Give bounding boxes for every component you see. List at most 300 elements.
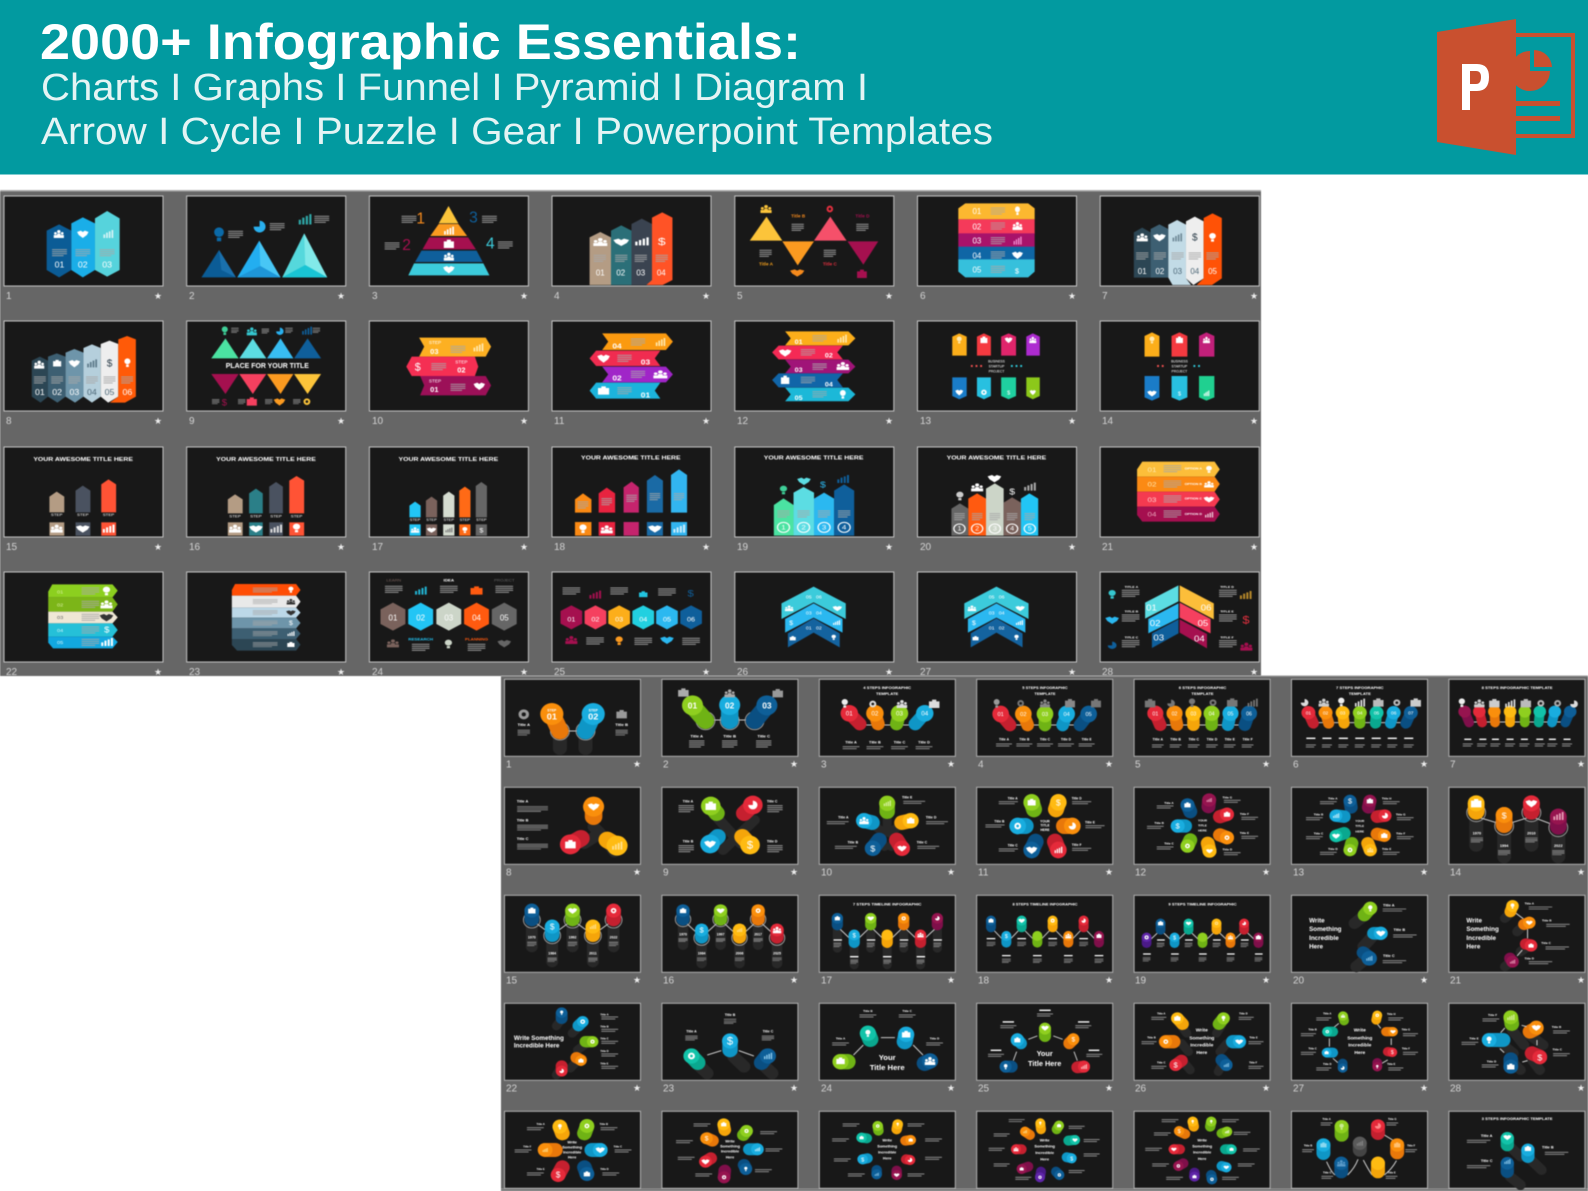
slide 24: your title here, four pills xyxy=(819,1003,955,1094)
slide 21: four option bands: 21 xyxy=(1102,542,1114,553)
slide 10: five petal pills: Title C xyxy=(917,840,928,844)
slide 26: chevron stack: $ xyxy=(789,620,793,627)
slide 5: alternating triangles: 5 xyxy=(737,291,743,302)
slide 34: seven vertical pills: Title C xyxy=(1323,1170,1332,1174)
slide 28: open book 3D chevron: TITLE E xyxy=(1220,610,1235,614)
slide 34: seven vertical pills: Title F xyxy=(1407,1144,1416,1148)
slide 14: six tag shapes: ★ xyxy=(1250,416,1258,426)
slide 25: your title here, five pills: $ xyxy=(1071,1037,1075,1044)
slide 35: three steps infographic template: Title A xyxy=(1481,1134,1493,1138)
slide 12: five ribbon arrows: ★ xyxy=(885,416,893,426)
slide 28: five pill cycle xyxy=(1449,1003,1585,1094)
slide 5: six steps infographic template: 03 xyxy=(1191,711,1196,717)
slide 13: eight petal pills: Title B xyxy=(1314,812,1324,816)
slide 6: stacked five bands: 02 xyxy=(973,223,981,232)
slide 8: three petal pills: ★ xyxy=(633,867,641,877)
slide 25: six coloured hexagons xyxy=(552,572,711,678)
slide 6: seven steps infographic template: 06 xyxy=(1391,710,1397,716)
slide 24: five hexagons: PROJECT xyxy=(494,578,515,583)
slide 6: stacked five bands: 03 xyxy=(973,237,981,246)
slide 12: seven petal pills: 12 xyxy=(1135,868,1147,878)
slide 28: open book 3D chevron: 01 xyxy=(1146,603,1157,612)
slide 20: write something, three pills: Write xyxy=(1309,918,1325,925)
slide 21: four option bands: ★ xyxy=(1250,542,1258,552)
slide 16: six step timeline: 2017 xyxy=(754,933,762,937)
slide 20: write something, three pills: ★ xyxy=(1420,975,1428,985)
slide 1: two step pills: STEP xyxy=(547,708,557,712)
slide 6: stacked five bands: 6 xyxy=(920,291,926,302)
slide 5: six steps infographic template: Title E xyxy=(1225,738,1236,742)
slide 9: four petal pills: 9 xyxy=(663,868,669,878)
slide 26: chevron stack: 01 xyxy=(806,626,812,631)
slide 19: four numbered arrow columns: 3 xyxy=(822,523,826,531)
slide 17: seven step timeline: 17 xyxy=(821,976,833,986)
slide 3: stepped pyramid xyxy=(369,196,528,302)
slide 29: six pill cycle: Title D xyxy=(600,1167,609,1171)
slide 16: six step timeline: 1997 xyxy=(717,933,725,937)
slide 27: write something, eight pills: Title H xyxy=(1387,1012,1396,1016)
slide 35: three steps infographic template: Title C xyxy=(1481,1159,1493,1163)
slide 8: six arrow columns: $ xyxy=(107,359,113,370)
slide 6: seven steps infographic template: 03 xyxy=(1340,710,1346,716)
slide 3: stepped pyramid: 3 xyxy=(469,210,478,227)
slide 16: six step timeline: 1970 xyxy=(679,933,687,937)
slide 27: chevron stack: 01 xyxy=(989,626,995,631)
slide 15: five step timeline: 15 xyxy=(506,976,518,986)
slide 34: seven vertical pills: Title E xyxy=(1387,1170,1396,1174)
slide 8: six arrow columns: 05 xyxy=(105,387,115,397)
slide 7: five arrow columns: 04 xyxy=(1190,267,1200,276)
slide 9: place for your title triangles: $ xyxy=(222,396,228,407)
slide 23: three arc pills xyxy=(662,1003,798,1094)
slide 4: five steps infographic template: 5 STEPS INFOGRAPHIC xyxy=(1022,685,1068,690)
slide 7: five arrow columns: 01 xyxy=(1138,267,1147,276)
slide 30: seven pill cycle: Something xyxy=(720,1145,741,1149)
slide 11: four ribbon arrows: 02 xyxy=(612,374,622,382)
slide 13: eight petal pills: TITLE xyxy=(1355,824,1364,828)
slide 26: chevron stack: 04 xyxy=(816,611,822,616)
slide 29: six pill cycle: Here xyxy=(568,1155,576,1159)
slide 12: five ribbon arrows xyxy=(735,321,894,427)
slide 15: five step timeline: 1970 xyxy=(528,936,536,940)
slide 20: write something, three pills: Incredible xyxy=(1309,935,1339,942)
slide 11: four ribbon arrows: 04 xyxy=(612,342,622,350)
slide 24: five hexagons: LEARN xyxy=(386,578,401,583)
slide 28: five pill cycle: ★ xyxy=(1577,1083,1585,1093)
slide 14: four step timeline: 1994 xyxy=(1500,844,1509,848)
slide 26: write something, six pills: Write xyxy=(1196,1028,1208,1034)
slide 5: alternating triangles: Title D xyxy=(855,214,870,219)
slide 20: write something, three pills: Title A xyxy=(1383,903,1395,907)
slide 22: write something incredible, five pills: ★ xyxy=(633,1083,641,1093)
slide 10: three ribbon arrows: ★ xyxy=(520,416,528,426)
slide 21: write something, four pills: Title C xyxy=(1541,941,1552,945)
slide 4: five steps infographic template xyxy=(977,679,1113,770)
slide 12: seven petal pills: HERE xyxy=(1198,829,1207,833)
slide 21: four option bands: OPTION C xyxy=(1185,497,1203,500)
slide 23: orange and slate stacked arrows: ★ xyxy=(337,667,345,677)
slide 24: your title here, four pills: Title C xyxy=(902,1009,913,1013)
slide 3: four steps infographic template: 01 xyxy=(846,711,853,718)
slide 20: five numbered arrow columns: $ xyxy=(1009,487,1016,497)
slide 17: seven step timeline: ★ xyxy=(947,975,955,985)
slide 26: write something, six pills: Title E xyxy=(1249,1036,1258,1040)
slide 20: write something, three pills: Here xyxy=(1309,943,1324,950)
slide 21: write something, four pills: Something xyxy=(1466,926,1499,933)
slide 30: seven pill cycle xyxy=(662,1111,798,1188)
slide 27: write something, eight pills: 27 xyxy=(1293,1084,1305,1094)
slide 4: five steps infographic template: Title C xyxy=(1040,738,1051,742)
slide 6: seven steps infographic template: 01 xyxy=(1306,710,1311,716)
slide 16: four step columns: STEP xyxy=(250,514,262,519)
slide 12: seven petal pills: YOUR xyxy=(1198,819,1208,823)
slide 6: seven steps infographic template: 6 xyxy=(1293,760,1299,770)
slide 19: four numbered arrow columns: 2 xyxy=(801,523,806,531)
slide 6: stacked five bands: $ xyxy=(1015,267,1019,275)
slide 23: three arc pills: Title A xyxy=(686,1030,697,1034)
slide 29: six pill cycle: Title C xyxy=(614,1144,622,1148)
slide 15: five step timeline: 2011 xyxy=(589,951,597,955)
slide 20: write something, three pills: Something xyxy=(1309,926,1342,933)
slide 16: six step timeline: ★ xyxy=(790,975,798,985)
slide 1: two step pills: 1 xyxy=(506,760,512,770)
slide 9: place for your title triangles: ★ xyxy=(337,416,345,426)
slide 4: five steps infographic template: 4 xyxy=(978,760,984,770)
slide 23: three arc pills: 23 xyxy=(663,1084,675,1094)
slide 15: five step timeline xyxy=(504,895,641,986)
slide 10: five petal pills: $ xyxy=(870,844,875,853)
slide 28: open book 3D chevron: 05 xyxy=(1198,619,1208,628)
slide 1: two step pills: Title A xyxy=(517,722,530,727)
slide 5: six steps infographic template: ★ xyxy=(1262,759,1270,769)
slide 31: eight pill cycle: Write xyxy=(882,1139,892,1143)
slide 24: your title here, four pills: Title A xyxy=(836,1037,846,1041)
slide 19: four numbered arrow columns: 19 xyxy=(737,542,749,553)
slide 3: stepped pyramid: 3 xyxy=(372,291,378,302)
slide 32: nine pill cycle: $ xyxy=(1070,1156,1074,1162)
slide 25: your title here, five pills: Title Here xyxy=(1028,1059,1061,1068)
slide 23: three arc pills: Title C xyxy=(763,1030,774,1034)
slide 19: nine step timeline: 19 xyxy=(1135,976,1147,986)
slide 25: six coloured hexagons: 04 xyxy=(639,615,647,623)
slide 19: four numbered arrow columns: 4 xyxy=(842,523,846,531)
slide 9: four petal pills: Title A xyxy=(683,800,694,804)
slide 15: three step columns xyxy=(4,447,163,553)
slide 19: nine step timeline: ★ xyxy=(1262,975,1270,985)
slide 10: three ribbon arrows: 01 xyxy=(430,385,438,394)
slide 5: six steps infographic template: 04 xyxy=(1209,711,1215,717)
slide 24: five hexagons: 24 xyxy=(372,667,384,678)
slide 1: three arrow columns: 02 xyxy=(78,259,88,269)
slide 18: eight step timeline: 8 STEPS TIMELINE INFOGRAPHIC xyxy=(1012,902,1078,907)
slide 11: six petal pills, your title here xyxy=(977,787,1113,878)
slide 7: five arrow columns: 03 xyxy=(1173,267,1182,276)
slide 4: five steps infographic template: 01 xyxy=(998,712,1004,718)
slide 2: three step pills: Title C xyxy=(757,733,770,738)
slide 21: write something, four pills xyxy=(1449,895,1585,986)
slide 3: four steps infographic template: 4 STEPS INFOGRAPHIC xyxy=(863,685,911,690)
slide 11: six petal pills, your title here: TITLE xyxy=(1040,824,1050,828)
slide 1: two step pills: STEP xyxy=(589,708,599,712)
slide 21: write something, four pills: Incredible xyxy=(1466,935,1497,942)
slide 26: write something, six pills: Title B xyxy=(1147,1036,1156,1040)
slide 11: six petal pills, your title here: Title C xyxy=(1008,844,1018,848)
slide 20: write something, three pills xyxy=(1292,895,1428,986)
slide 11: six petal pills, your title here: Title B xyxy=(994,820,1005,824)
slide 17: five step columns: STEP xyxy=(476,518,487,522)
slide 22: green and cyan stacked arrows: 22 xyxy=(6,667,18,678)
slide 2: three step pills: 02 xyxy=(725,702,735,711)
slide 8: six arrow columns: 04 xyxy=(87,387,97,397)
slide 15: five step timeline: $ xyxy=(550,923,555,932)
slide 16: six step timeline: 1984 xyxy=(698,952,706,956)
slide 12: seven petal pills: $ xyxy=(1176,822,1181,831)
slide 11: six petal pills, your title here: HERE xyxy=(1040,828,1050,832)
slide 28: open book 3D chevron: 02 xyxy=(1150,619,1161,628)
slide 12: seven petal pills: Title F xyxy=(1240,812,1249,816)
slide 21: four option bands: 01 xyxy=(1148,466,1156,474)
slide 21: four option bands: OPTION D xyxy=(1185,512,1203,516)
slide 27: chevron stack: 06 xyxy=(999,595,1005,600)
slide 13: eight petal pills: Title C xyxy=(1314,831,1324,835)
slide 24: five hexagons: 01 xyxy=(389,613,397,622)
slide 17: five step columns xyxy=(369,447,528,553)
slide 32: nine pill cycle: Here xyxy=(1040,1156,1050,1161)
slide 28: open book 3D chevron: 04 xyxy=(1194,634,1205,643)
slide 28: open book 3D chevron: TITLE B xyxy=(1125,610,1139,614)
slide 3: four steps infographic template: Title C xyxy=(894,740,906,744)
slide 27: chevron stack: 27 xyxy=(920,667,932,678)
slide 5: six steps infographic template: 02 xyxy=(1172,711,1178,717)
slide 10: three ribbon arrows: STEP xyxy=(455,359,468,364)
slide 1: two step pills: ★ xyxy=(633,759,641,769)
slide 34: seven vertical pills: Title B xyxy=(1304,1144,1312,1148)
slide 2: three step pills: Title B xyxy=(723,733,736,738)
slide 11: six petal pills, your title here: $ xyxy=(1056,797,1061,807)
slide 8: six arrow columns: 03 xyxy=(69,387,79,397)
slide 2: three step pills: Title A xyxy=(690,733,703,738)
slide 30: seven pill cycle: Here xyxy=(726,1156,734,1160)
slide 4: five steps infographic template: Title D xyxy=(1061,738,1072,742)
slide 19: four numbered arrow columns: ★ xyxy=(885,542,893,552)
slide 13: eight tag shapes: PROJECT xyxy=(989,369,1005,373)
slide 3: stepped pyramid: 4 xyxy=(486,236,495,253)
slide 35: three steps infographic template xyxy=(1449,1111,1585,1188)
slide 33: ten pill cycle xyxy=(1134,1111,1270,1188)
slide 35: three steps infographic template: Title B xyxy=(1542,1146,1554,1150)
slide 4: five steps infographic template: 05 xyxy=(1086,712,1092,718)
slide 27: chevron stack: ★ xyxy=(1068,667,1076,677)
slide 12: five ribbon arrows: 01 xyxy=(795,338,803,346)
slide 28: open book 3D chevron: TITLE F xyxy=(1220,636,1234,639)
slide 16: four step columns: ★ xyxy=(337,542,345,552)
slide 20: write something, three pills: Title C xyxy=(1383,954,1395,958)
slide 2: three step pills xyxy=(662,679,798,770)
slide 27: write something, eight pills: Title B xyxy=(1308,1028,1317,1032)
slide 29: six pill cycle: $ xyxy=(556,1171,561,1180)
slide 27: write something, eight pills: $ xyxy=(1391,1050,1394,1056)
slide 18: five coloured step columns: 18 xyxy=(554,542,566,553)
slide 5: six steps infographic template: Title C xyxy=(1188,738,1200,742)
slide 8: three petal pills: Title B xyxy=(517,819,529,823)
slide 27: chevron stack: 02 xyxy=(999,626,1005,631)
slide 4: five steps infographic template: 03 xyxy=(1042,712,1048,718)
panel: bottom slide sorter, 35 pill diagram slides xyxy=(501,676,1588,1191)
slide 13: eight petal pills: 13 xyxy=(1293,868,1305,878)
slide 12: five ribbon arrows: 02 xyxy=(825,352,833,359)
slide 2: three mountain triangles xyxy=(187,196,346,302)
slide 19: nine step timeline: $ xyxy=(1173,935,1176,941)
slide 13: eight tag shapes: 13 xyxy=(920,416,932,427)
slide 6: seven steps infographic template: 02 xyxy=(1323,710,1329,716)
slide 31: eight pill cycle: Incredible xyxy=(878,1150,896,1154)
slide 23: three arc pills: Title B xyxy=(725,1013,736,1017)
slide 22: write something incredible, five pills: Title B xyxy=(600,1024,609,1028)
slide 28: open book 3D chevron: 06 xyxy=(1201,603,1212,612)
slide 23: three arc pills: ★ xyxy=(790,1083,798,1093)
slide 18: eight step timeline: $ xyxy=(1005,934,1009,940)
slide 13: eight petal pills: Title G xyxy=(1396,812,1406,816)
slide 11: six petal pills, your title here: YOUR xyxy=(1040,820,1050,824)
slide 27: write something, eight pills: ★ xyxy=(1420,1083,1428,1093)
slide 22: green and cyan stacked arrows: 05 xyxy=(57,640,63,646)
slide 9: four petal pills: $ xyxy=(747,840,753,852)
slide 24: five hexagons: IDEA xyxy=(444,578,454,583)
slide 29: six pill cycle: Something xyxy=(562,1145,583,1149)
slide 6: stacked five bands xyxy=(918,196,1076,302)
slide 11: four ribbon arrows: 11 xyxy=(554,416,565,427)
slide 29: six pill cycle: Title A xyxy=(536,1122,545,1126)
slide 27: chevron stack: $ xyxy=(972,620,976,627)
slide 13: eight petal pills: Title H xyxy=(1382,796,1391,800)
slide 21: write something, four pills: Title D xyxy=(1525,956,1535,960)
slide 14: four step timeline: ★ xyxy=(1577,867,1585,877)
slide 27: write something, eight pills: Write xyxy=(1354,1028,1366,1034)
title: 2000+ Infographic Essentials: xyxy=(40,14,801,70)
slide 26: chevron stack: 06 xyxy=(816,595,822,600)
slide 28: five pill cycle: Title C xyxy=(1552,1048,1563,1052)
slide 28: open book 3D chevron: TITLE C xyxy=(1125,636,1139,639)
slide 15: three step columns: STEP xyxy=(103,512,115,517)
slide 3: four steps infographic template: Title A xyxy=(845,740,857,744)
slide 22: write something incredible, five pills: Title D xyxy=(600,1049,609,1053)
slide 29: six pill cycle: Incredible xyxy=(563,1150,581,1154)
slide 26: write something, six pills: Here xyxy=(1196,1050,1208,1056)
slide 17: five step columns: STEP xyxy=(410,518,421,522)
slide 22: green and cyan stacked arrows: $ xyxy=(104,625,110,634)
slide 21: four option bands: 02 xyxy=(1148,480,1156,488)
slide 10: five petal pills: Title E xyxy=(902,796,913,800)
slide 11: six petal pills, your title here: Title D xyxy=(1072,796,1082,800)
slide 11: six petal pills, your title here: Title F xyxy=(1072,843,1082,847)
slide 28: five pill cycle: Title B xyxy=(1552,1025,1562,1029)
slide 6: seven steps infographic template: 07 xyxy=(1408,710,1414,716)
slide 33: ten pill cycle: Write xyxy=(1197,1139,1207,1143)
slide 28: five pill cycle: Title E xyxy=(1469,1036,1479,1040)
slide 29: six pill cycle xyxy=(504,1111,640,1188)
slide 10: three ribbon arrows: 03 xyxy=(430,347,438,356)
slide 14: six tag shapes: STARTUP xyxy=(1172,364,1187,368)
slide 16: four step columns: 16 xyxy=(189,542,201,553)
slide 14: six tag shapes: $ xyxy=(1178,391,1181,397)
slide 31: eight pill cycle: $ xyxy=(861,1157,865,1163)
slide 5: alternating triangles: Title A xyxy=(759,262,773,267)
slide 10: five petal pills: Title A xyxy=(838,816,849,820)
slide 7: eight steps infographic template: 7 xyxy=(1450,760,1456,770)
slide 26: chevron stack xyxy=(735,572,894,678)
slide 8: three petal pills xyxy=(504,787,641,878)
slide 27: write something, eight pills: Title F xyxy=(1402,1046,1410,1050)
slide 32: nine pill cycle: Something xyxy=(1034,1144,1056,1149)
slide 11: six petal pills, your title here: Title A xyxy=(1008,796,1018,800)
slide 18: eight step timeline: 18 xyxy=(978,976,990,986)
slide 4: four arrow columns: 03 xyxy=(636,268,645,278)
slide 7: five arrow columns xyxy=(1100,196,1259,302)
slide 4: four arrow columns: 01 xyxy=(596,268,605,278)
slide 24: five hexagons: RESEARCH xyxy=(408,637,433,642)
slide 24: five hexagons: PLANNING xyxy=(465,637,488,642)
slide 28: open book 3D chevron: 03 xyxy=(1153,633,1164,642)
slide 1: two step pills: Title B xyxy=(615,722,628,727)
slide 3: four steps infographic template: ★ xyxy=(947,759,955,769)
slide 21: write something, four pills: Title A xyxy=(1525,901,1535,905)
slide 27: write something, eight pills: Incredible xyxy=(1348,1043,1372,1049)
slide 4: five steps infographic template: TEMPLATE xyxy=(1034,691,1056,696)
slide 25: your title here, five pills: ★ xyxy=(1105,1083,1113,1093)
slide 4: five steps infographic template: Title E xyxy=(1082,738,1092,742)
slide 14: six tag shapes: BUSINESS xyxy=(1171,359,1188,363)
slide 12: seven petal pills xyxy=(1134,787,1270,878)
slide 11: six petal pills, your title here: 11 xyxy=(978,868,989,878)
slide 17: seven step timeline: $ xyxy=(852,932,857,939)
slide 20: five numbered arrow columns xyxy=(918,447,1076,553)
slide 2: three step pills: ★ xyxy=(790,759,798,769)
slide 1: three arrow columns xyxy=(4,196,163,302)
slide 5: six steps infographic template: Title B xyxy=(1170,738,1181,742)
slide 27: write something, eight pills: Title C xyxy=(1308,1046,1317,1050)
slide 20: five numbered arrow columns: 5 xyxy=(1028,526,1032,532)
slide 19: nine step timeline: 9 STEPS TIMELINE INFOGRAPHIC xyxy=(1168,902,1237,907)
slide 20: five numbered arrow columns: 3 xyxy=(993,526,997,532)
slide 2: three step pills: 01 xyxy=(688,702,698,711)
slide 34: seven vertical pills xyxy=(1292,1111,1428,1188)
slide 5: alternating triangles: Title C xyxy=(823,262,837,267)
slide 6: seven steps infographic template: TEMPLATE xyxy=(1349,691,1371,696)
slide 3: four steps infographic template: Title D xyxy=(918,740,930,744)
slide 6: seven steps infographic template: 04 xyxy=(1357,710,1363,716)
slide 18: five coloured step columns: YOUR AWESOME TITLE HERE xyxy=(581,456,681,461)
slide 24: your title here, four pills: Title Here xyxy=(870,1063,905,1072)
slide 12: seven petal pills: Title D xyxy=(1223,848,1233,852)
slide 21: write something, four pills: 21 xyxy=(1450,976,1462,986)
slide 14: four step timeline: 14 xyxy=(1450,868,1462,878)
slide 5: alternating triangles xyxy=(735,196,894,302)
slide 19: four numbered arrow columns: 1 xyxy=(781,523,786,531)
slide 10: five petal pills: 10 xyxy=(821,868,833,878)
slide 18: five coloured step columns: ★ xyxy=(702,542,710,552)
slide 22: write something incredible, five pills xyxy=(504,1003,641,1094)
slide 12: seven petal pills: TITLE xyxy=(1198,824,1207,828)
slide 16: four step columns: STEP xyxy=(229,514,241,519)
slide 16: four step columns: YOUR AWESOME TITLE HERE xyxy=(216,457,316,463)
slide 5: six steps infographic template: 5 xyxy=(1135,760,1141,770)
slide 3: four steps infographic template: 03 xyxy=(896,711,904,718)
slide 23: orange and slate stacked arrows xyxy=(187,572,346,678)
slide 15: five step timeline: 2022 xyxy=(610,936,618,940)
slide 28: five pill cycle: Title F xyxy=(1488,1013,1497,1017)
slide 23: orange and slate stacked arrows: 23 xyxy=(189,667,201,678)
slide 7: eight steps infographic template: ★ xyxy=(1577,759,1585,769)
